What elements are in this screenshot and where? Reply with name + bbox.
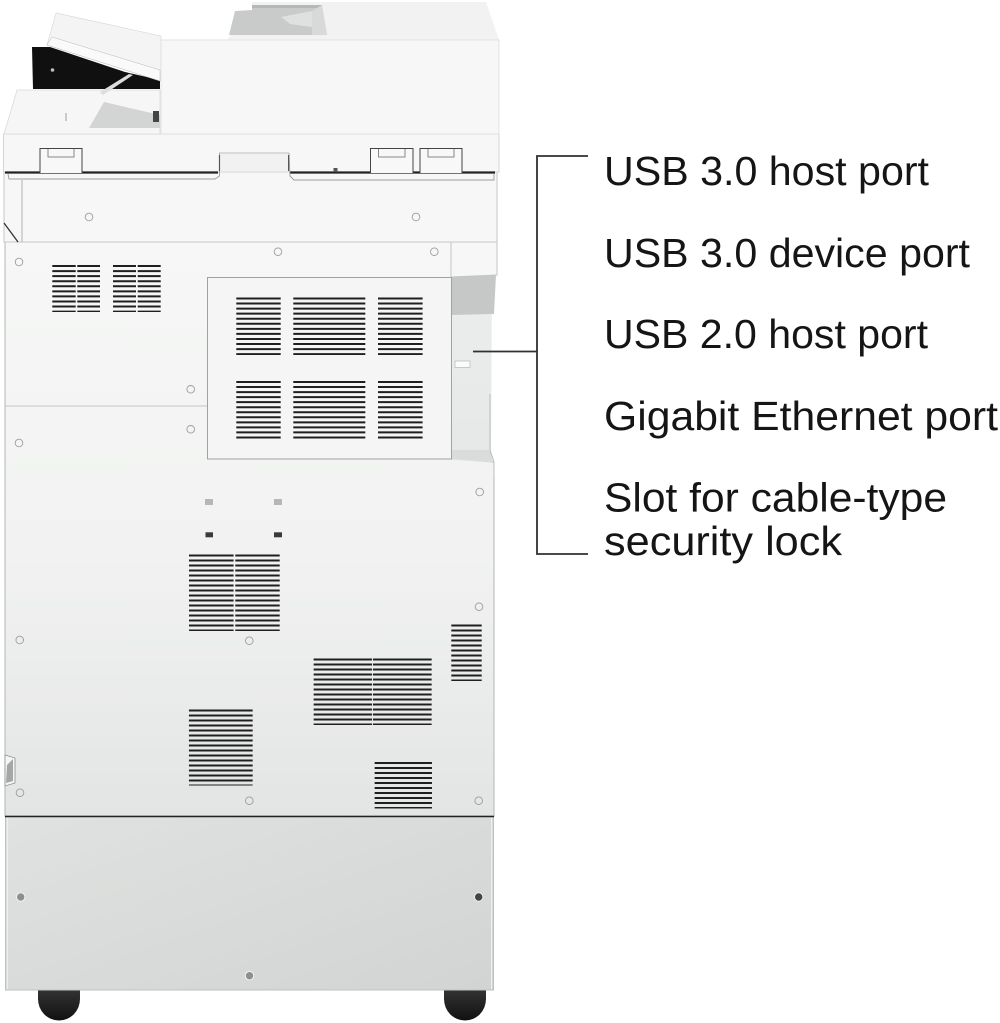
screws <box>15 213 484 804</box>
vent: bottom left <box>189 710 253 786</box>
printer illustration <box>4 2 499 1020</box>
label: Gigabit Ethernet port: Gigabit Ethernet port <box>604 393 999 439</box>
lower lip outlines <box>8 153 494 180</box>
divider line above cabinet <box>5 816 494 818</box>
vent: top left pair <box>64 265 149 312</box>
caster wheel right <box>444 990 486 1020</box>
main body lower panel <box>5 242 494 816</box>
vent: middle pair <box>343 658 402 725</box>
callout labels <box>604 148 999 564</box>
vent: right narrow <box>451 624 482 681</box>
scanner band <box>4 134 499 180</box>
latch left <box>40 148 82 173</box>
mounting tabs <box>205 499 282 537</box>
cabinet screws <box>16 893 483 980</box>
document feeder top <box>161 2 499 134</box>
upper right box <box>451 242 497 277</box>
recess bottom ledge <box>452 450 493 462</box>
paper input tray <box>229 5 327 35</box>
label: USB 2.0 host port: USB 2.0 host port <box>604 311 929 357</box>
right side recess <box>451 275 496 476</box>
side handle notch <box>5 755 15 786</box>
vent: bottom right <box>375 762 432 808</box>
label: Slot for cable-type security lock: Slot for cable-type <box>604 474 947 520</box>
document feeder output tray <box>4 13 161 134</box>
vent: center pair <box>211 554 258 631</box>
vents <box>64 265 466 808</box>
port tab <box>455 361 470 368</box>
cabinet base <box>6 816 494 990</box>
label: Slot for cable-type security lock: security lock <box>604 518 843 564</box>
latch middle <box>370 148 413 173</box>
label: Slot for cable-type security lock <box>604 474 947 564</box>
small notch <box>334 168 338 172</box>
latch right <box>420 148 462 173</box>
recess grey top <box>452 275 496 315</box>
rear service panel <box>208 278 452 459</box>
label: USB 3.0 host port: USB 3.0 host port <box>604 148 930 194</box>
center handle <box>221 154 288 171</box>
caster wheel left <box>38 990 80 1020</box>
vent: service panel lower <box>258 381 400 438</box>
callout bracket <box>473 156 588 554</box>
upper rear panel <box>4 172 497 242</box>
vent: service panel upper <box>258 298 400 355</box>
seam line <box>5 405 207 407</box>
dark gap lines <box>5 171 495 174</box>
label: USB 3.0 device port: USB 3.0 device port <box>604 230 971 276</box>
